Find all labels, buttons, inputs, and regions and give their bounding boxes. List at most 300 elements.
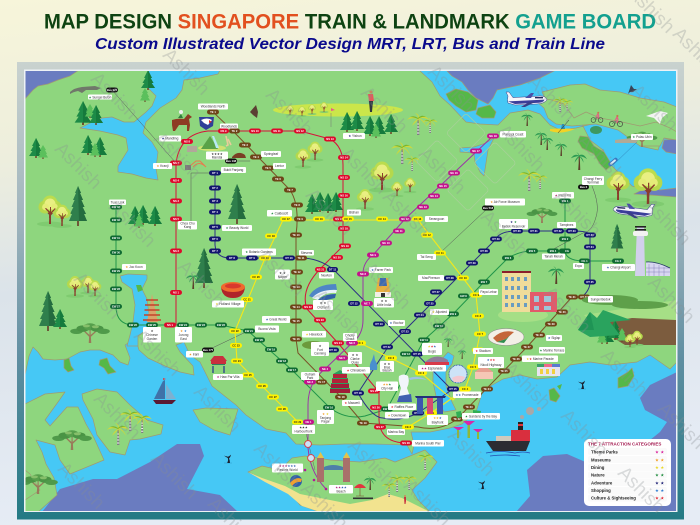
thomson-east coast stations: TE 23 (465, 405, 473, 409)
icon: white bird (646, 111, 668, 124)
legend: the 7 attraction categories: Culture & Sightseeing (591, 496, 636, 500)
station labels: Newton (321, 274, 332, 278)
icon: sri mariamman temple (375, 278, 391, 297)
station labels: ★ ★ (381, 299, 388, 303)
north-south stations: NS 20 (333, 256, 341, 260)
station labels: Marina South Pier (415, 442, 442, 446)
circle yellow line (235, 220, 480, 427)
station labels: Bedok Reservoir (502, 224, 526, 228)
north-east stations: NE 12 (401, 217, 409, 221)
thomson-east coast stations: TE 2 (232, 129, 238, 133)
east-west stations: EW 25 (148, 323, 157, 327)
circle line stations: CC 26 (258, 384, 266, 388)
watermarks: Ashish (626, 81, 681, 136)
icon: eagle badge (199, 117, 214, 130)
watermarks: Ashish (639, 195, 694, 250)
station labels: Clarke (350, 357, 360, 361)
circle line stations: CC 3 (418, 371, 425, 375)
watermarks: Ashish (414, 144, 469, 199)
north-south stations: NS 26 (372, 406, 380, 410)
east-west stations: EW 31 (112, 236, 121, 240)
north-south stations: NS 13 (326, 137, 334, 141)
station labels: Dhoby (345, 334, 355, 338)
station labels: Pagar (321, 420, 331, 424)
north-south stations: NS 27 (376, 425, 384, 429)
station labels: Expo (575, 264, 582, 268)
south deep water (42, 444, 238, 512)
east-west stations: EW 10 (435, 324, 444, 328)
circle line stations: CC 18 (267, 234, 275, 238)
north-south stations: NS 9 (221, 129, 227, 133)
icon: horse and rider (172, 110, 192, 131)
icon: esplanade and theatre (425, 356, 449, 365)
circle line stations: CC 25 (244, 373, 252, 377)
circle line stations: CC 1 (357, 341, 364, 345)
circle line stations: CC 16 (315, 217, 323, 221)
ferry line (613, 142, 637, 165)
downtown stations: DT 2 (212, 186, 218, 190)
station labels: Tuas Link (111, 200, 125, 204)
station labels: Jurong (179, 333, 189, 337)
watermarks: Ashish (613, 463, 668, 518)
station labels: ★ Yishun (348, 134, 362, 138)
thomson-east coast stations: TE 9 (297, 217, 303, 221)
station labels: ★★★★ (211, 152, 223, 156)
station labels: ★ Mandling (162, 137, 179, 141)
downtown stations: DT 11 (329, 268, 337, 272)
station labels: Canning (314, 352, 326, 356)
watermarks: Ashish (89, 389, 144, 444)
watermarks: Ashish (173, 257, 228, 312)
north-east stations: NE 13 (419, 205, 427, 209)
downtown stations: DT 9 (249, 256, 255, 260)
thomson-east coast stations: TE 17 (318, 380, 326, 384)
beach line stops (304, 469, 327, 490)
station labels: ★ Sungei Buloh (89, 95, 112, 99)
thomson-east coast stations: TE 22 (453, 417, 461, 421)
thin mrt link lines (112, 90, 597, 350)
station labels: Ghaut (346, 337, 354, 341)
east-west stations: EW 2 (562, 237, 569, 241)
circle line stations: CC 22 (231, 329, 239, 333)
legend: the 7 attraction categories: Nature (591, 473, 605, 478)
thomson-east coast stations: TE 4 (253, 155, 259, 159)
downtown stations: DT 25 (426, 302, 434, 306)
legend: the 7 attraction categories: Theme Parks (591, 450, 618, 454)
icon: steamship (486, 407, 541, 456)
legend: the 7 attraction categories: ★ ★ (655, 488, 664, 494)
legend: the 7 attraction categories: ★ ★ (655, 473, 664, 479)
downtown stations: DT 23 (401, 330, 409, 334)
Johor strait and Kranji reservoir (80, 70, 220, 180)
thomson-east coast stations: TE 18 (337, 395, 345, 399)
station labels: Punggol Coast (503, 132, 524, 136)
station labels: ★★★ (299, 426, 308, 430)
station labels: ★ Holland Village (216, 302, 241, 306)
legend: the 7 attraction categories: Adventure (591, 480, 613, 485)
circle line stations: CC 28 (278, 407, 286, 411)
east-west stations: EW 16 (325, 406, 334, 410)
legend: the 7 attraction categories: ★ ★ (655, 450, 664, 456)
thomson-east coast stations: TE 27 (523, 345, 531, 349)
station labels: ★★★ (428, 344, 436, 348)
station labels: Woodlands (221, 124, 237, 128)
watermarks: Ashish (149, 129, 204, 184)
station labels: City Hall (381, 386, 393, 390)
icon: sailboat (153, 378, 176, 404)
north-east stations: NE 10 (382, 241, 390, 245)
station labels: ★★★ (383, 382, 391, 386)
north-south stations: NS 1 (167, 323, 173, 327)
Marina reservoir (433, 352, 456, 412)
north-south stations: NS 11 (273, 129, 281, 133)
legend: the 7 attraction categories: Dining (591, 465, 605, 470)
station labels: Fort (317, 348, 323, 352)
trees: flat-top rain trees (18, 132, 657, 494)
icon: adventure globe (290, 475, 302, 487)
thomson-east coast stations: TE 15 (292, 319, 300, 323)
station labels: ★ ★ (320, 301, 327, 305)
watermarks: Ashish (146, 449, 201, 504)
downtown stations: DT 29 (492, 237, 500, 241)
north-south stations: NS 17 (335, 217, 343, 221)
watermarks: Ashish (69, 269, 124, 324)
downtown stations: DT 22 (383, 345, 391, 349)
downtown stations: DT 13 (375, 322, 383, 326)
station labels: ★ ★ (352, 353, 359, 357)
watermarks: Ashish (189, 382, 244, 437)
station labels: Marina Bay (388, 430, 404, 434)
station labels: Paya Lebar (480, 290, 498, 294)
circle line stations: CE 1 (428, 411, 434, 415)
east-west stations: EW 29 (112, 269, 121, 273)
icon: dark bird (628, 85, 637, 94)
circle line stations: CC 27 (269, 395, 277, 399)
downtown stations: DT 3 (212, 199, 218, 203)
east-west stations: EW 28 (112, 287, 121, 291)
circle line stations: CC 15 (344, 217, 352, 221)
north-east deep water (446, 70, 556, 104)
downtown stations: DT 19 (329, 348, 337, 352)
circle line stations: CC 13 (414, 217, 422, 221)
watermarks: Ashish (423, 62, 478, 117)
station labels: ★ Changi Airport (607, 266, 631, 270)
east-west stations: EW 18 (278, 359, 287, 363)
station labels: ★ ★ (279, 271, 286, 275)
bus and lrt stops (106, 88, 589, 352)
title: MAP DESIGN SINGAPORE TRAIN & LANDMARK GAME BOARD (44, 10, 656, 34)
station labels: ★ Gardens by the Bay (465, 414, 497, 418)
east-west stations: EW 30 (112, 250, 121, 254)
downtown stations: DT 4 (212, 210, 218, 214)
station labels: ★ (151, 329, 154, 333)
icon: shrub (590, 126, 602, 134)
icon: shophouses (537, 364, 560, 376)
station labels: Outram (305, 372, 316, 376)
east-west stations: EW 14 (383, 407, 392, 411)
watermarks: Ashish (539, 283, 594, 338)
watermarks: Ashish (261, 85, 316, 140)
downtown stations: DT 31 (530, 229, 538, 233)
downtown stations: DT 1 (212, 171, 218, 175)
north-south stations: NS 2 (173, 249, 179, 253)
watermarks: Ashish (50, 139, 105, 194)
east-west stations: EW 1 (562, 199, 569, 203)
circle line stations: CC 19 (261, 256, 269, 260)
thomson-east coast stations: TE 25 (500, 369, 508, 373)
station labels: ★ Chinatown (347, 368, 366, 372)
watermarks: Ashish (336, 144, 391, 199)
station labels: Little India (377, 303, 391, 307)
watermarks: Ashish (416, 303, 471, 358)
station labels: Stevens (301, 251, 313, 255)
north-south stations: NS 8 (184, 140, 190, 144)
north-west deep water (24, 70, 79, 99)
station labels: ★ Kranji (157, 164, 169, 168)
icon: orchard shell (309, 284, 337, 302)
subtitle: Custom Illustrated Vector Design MRT, LRT, Bus and Train Line (95, 36, 605, 53)
downtown stations: DT 7 (212, 249, 218, 253)
north-east stations: NE 18 (489, 134, 497, 138)
watermarks: Ashish (596, 346, 651, 401)
station labels: Beach (336, 490, 346, 494)
thomson-east coast stations: TE 11 (297, 256, 305, 260)
north-east stations: NE 3 (307, 380, 313, 384)
right edge deep water upper (662, 139, 677, 154)
icon: bras basah bottle (370, 354, 377, 370)
thomson-east coast stations: TE 30 (558, 310, 566, 314)
downtown stations: DT 15 (449, 387, 457, 391)
east-west stations (110, 198, 624, 412)
thomson brown line (213, 112, 582, 428)
north-south stations: NS 7 (173, 161, 179, 165)
thomson-east coast stations: TE 13 (292, 285, 300, 289)
station labels: Tanah Merah (544, 254, 563, 258)
station labels: Resorts World (277, 468, 298, 472)
station labels: ★ Haw Par Villa (217, 375, 240, 379)
watermarks: Ashish (359, 259, 414, 314)
river islands (446, 89, 677, 170)
north-south stations: NS 21 (317, 268, 325, 272)
station labels: Park (307, 376, 314, 380)
legend: the 7 attraction categories (584, 439, 671, 506)
station labels: ★ ★ (322, 412, 329, 416)
watermarks: Ashish (129, 326, 184, 381)
station labels: ★ Irani (189, 352, 199, 356)
station labels: Orchard (317, 306, 329, 310)
circle line stations: CE 2 (405, 425, 411, 429)
icon: condominium tower (502, 271, 531, 312)
Punggol river inlet (460, 138, 494, 176)
north-east stations: NE 9 (370, 253, 376, 257)
circle line stations (229, 216, 486, 430)
north-east stations: NE 11 (395, 229, 403, 233)
lighter park grass east (498, 300, 677, 345)
downtown stations: DT 27 (432, 290, 440, 294)
watermarks: Ashish (643, 273, 698, 328)
legend: the 7 attraction categories: Museums (591, 457, 611, 462)
station labels: ★ Caldecott (271, 212, 288, 216)
north-east stations: NE 5 (339, 356, 345, 360)
station labels: Napier (278, 275, 288, 279)
watermarks: Ashish (476, 207, 531, 262)
bus and lrt stops: Bus 138 (226, 159, 237, 163)
thomson-east coast stations: TE 5 (265, 166, 271, 170)
north-south stations: NS 1 (173, 290, 179, 294)
icon: marina bay sands (415, 396, 446, 414)
watermarks: Ashish (249, 439, 304, 494)
thomson-east coast stations: DT 37 (580, 295, 588, 299)
station labels: Nicoll Highway (481, 363, 502, 367)
bus and lrt stops: Bus 925 (107, 88, 118, 92)
station labels: ★ Aljunied (432, 310, 447, 314)
station labels: ★ Air Force Museum (490, 200, 520, 204)
icon: pulau ubin jetty (615, 137, 640, 143)
southern islands (24, 285, 634, 512)
thomson-east coast stations: TE 28 (535, 333, 543, 337)
bus and lrt stops: Bus 2 (580, 185, 588, 189)
icon: pink shophouse (530, 292, 557, 312)
station labels: ★ Beauty World (226, 226, 249, 230)
east-west stations: EW 19 (267, 348, 276, 352)
watermarks: Ashish (443, 426, 498, 481)
watermarks: Ashish (523, 72, 578, 127)
station labels: Terminal (587, 181, 599, 185)
circle line stations: CC 10 (459, 276, 467, 280)
north-east purple line (308, 136, 493, 489)
icon: whale tails (224, 381, 586, 489)
downtown stations: DT 15 (413, 352, 421, 356)
station labels: Buona Vista (258, 327, 276, 331)
downtown stations: DT 30 (513, 229, 521, 233)
east-west stations: CG (565, 249, 569, 253)
icon: cyclists (591, 112, 623, 127)
station labels: Basah (382, 368, 392, 372)
station labels: Changi Ferry (584, 177, 603, 181)
circle line stations: CC 23 (232, 344, 240, 348)
downtown stations: DT 8 (229, 256, 235, 260)
thomson-east coast stations: TE 26 (512, 357, 520, 361)
trees: round canopy (37, 102, 664, 348)
north-east stations (303, 134, 499, 424)
station labels: ★ Havelock (306, 332, 323, 336)
thomson-east coast stations: TE 7 (287, 188, 293, 192)
north-south stations: NS 25 (370, 389, 378, 393)
station labels: Tampines (560, 223, 574, 227)
icon: beach golfer (404, 495, 406, 504)
station labels: Quay (351, 360, 359, 364)
station labels: ★★★ (487, 358, 495, 362)
icon: chinese garden pagoda (143, 294, 161, 322)
circle line stations: CC 2 (388, 356, 395, 360)
circle line stations: CC 8 (475, 314, 482, 318)
thomson-east coast stations: TE 6 (275, 177, 281, 181)
station labels: Choa Chu (180, 222, 195, 226)
north-south stations: NS 5 (173, 217, 179, 221)
station labels: Sungei Bedok (591, 298, 611, 302)
east-west stations: EW 21 (245, 329, 254, 333)
east-west stations: EW 23 (197, 323, 206, 327)
map board (26, 71, 676, 511)
downtown stations: DT 33 (586, 233, 594, 237)
icon: plane changi (613, 202, 655, 219)
station labels: ★★★★ (335, 486, 347, 490)
thomson-east coast stations: TE 3 (242, 143, 248, 147)
station labels: Chinese (146, 333, 158, 337)
east-west stations: EW 27 (112, 304, 121, 308)
downtown stations: DT 29 (468, 261, 476, 265)
circle line stations: CC 24 (233, 359, 241, 363)
watermarks: Ashish (53, 459, 108, 514)
east-west stations: EW 24 (179, 323, 188, 327)
right edge deep water lower (634, 186, 677, 197)
circle line stations: CC 6 (475, 348, 482, 352)
icon: supertrees (453, 410, 483, 439)
thomson-east coast stations: TE 29 (547, 322, 555, 326)
station labels: Bugis (428, 350, 436, 354)
north-south stations: NS 28 (402, 441, 410, 445)
east-west stations: EW 26 (129, 323, 138, 327)
east-west stations: EW 8 (460, 294, 467, 298)
station labels: ★ Stadium (475, 349, 491, 353)
north-south stations: NS 12 (296, 129, 304, 133)
station labels: MacPherson (422, 276, 440, 280)
station labels: Garden (147, 337, 158, 341)
watermarks: Ashish (343, 436, 398, 491)
north-east stations: NE 14 (430, 194, 438, 198)
east-west stations: EW 4 (550, 249, 557, 253)
thomson-east coast stations (207, 110, 590, 426)
north-east stations: NE 1 (306, 420, 312, 424)
circle line stations: CC 4 (462, 387, 469, 391)
station labels: Springleaf (264, 152, 278, 156)
watermarks: Ashish (309, 286, 364, 341)
station labels: Bayfront (432, 420, 444, 424)
legend: the 7 attraction categories: ★ ★ (655, 496, 664, 502)
east-west stations: EW 32 (112, 218, 121, 222)
station labels: Bukit Panjang (224, 168, 244, 172)
thomson-east coast stations: TE 1 (210, 110, 216, 114)
north-south stations: NS 10 (251, 129, 259, 133)
north-east stations: NE 15 (439, 184, 447, 188)
icon: fort canning greenery (302, 341, 324, 349)
station labels: ★ Great World (266, 318, 287, 322)
watermarks: Ashish (104, 197, 159, 252)
golf course green (273, 104, 403, 127)
downtown stations: DT 12 (350, 302, 358, 306)
circle line stations: CC 5 (470, 365, 477, 369)
east-west stations: EW 7 (481, 280, 488, 284)
downtown stations: DT 18 (354, 391, 362, 395)
group: Mandai wildlife park (185, 136, 246, 170)
watermarks: Ashish (573, 131, 628, 186)
icon: blue ferry (608, 157, 618, 167)
north-south stations: NS 15 (340, 176, 348, 180)
legend: the 7 attraction categories: ★ ★ (655, 457, 664, 463)
station labels: Serangoon (429, 217, 445, 221)
east-west stations: EW 11 (420, 338, 428, 342)
thomson-east coast stations: TE 12 (293, 270, 301, 274)
icon: sentosa bridge (317, 452, 350, 482)
icon: kayaker (550, 120, 575, 133)
watermarks: Ashish (549, 187, 604, 242)
south-east deep water (516, 372, 677, 512)
east-west stations: EW 5 (529, 249, 536, 253)
Sentosa island (248, 450, 437, 512)
station labels: ★ Farrer Park (371, 268, 391, 272)
thomson-east coast stations: TE 19 (359, 421, 367, 425)
station labels: Tai Seng (420, 255, 433, 259)
